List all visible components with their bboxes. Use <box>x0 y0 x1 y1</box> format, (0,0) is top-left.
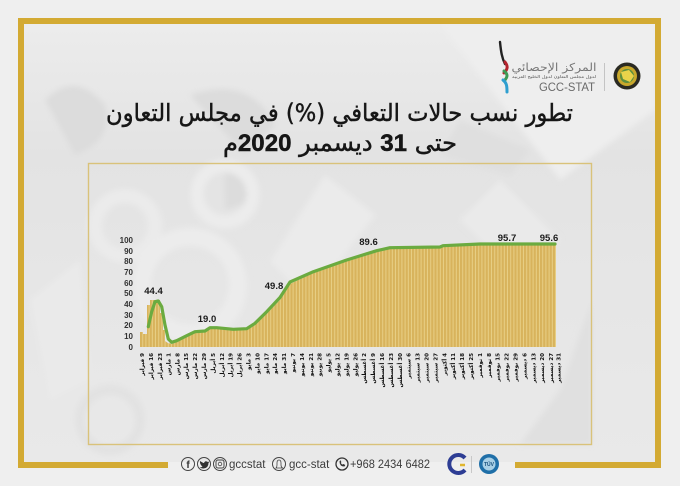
x axis date labels: 18 أكتوبر <box>458 353 466 380</box>
icon: G certification mark <box>449 455 465 473</box>
title: تطور نسب حالات التعافي (%) في مجلس التعاون <box>106 99 573 127</box>
x axis date labels: 31 مايو <box>282 353 288 375</box>
icon: TUV badge: TÜV <box>484 461 495 468</box>
x axis date labels: 19 يوليو <box>344 353 350 377</box>
x axis date labels: 16 أغسطس <box>378 353 386 388</box>
x axis date labels: 27 سبتمبر <box>433 353 439 383</box>
x axis date labels: 6 ديسمبر <box>522 353 528 380</box>
x axis date labels: 29 مارس <box>202 353 208 379</box>
data labels: 95.7 <box>498 233 516 244</box>
handle gccstat: gccstat <box>229 459 266 471</box>
x axis date labels: 3 مايو <box>246 353 252 371</box>
logo swoosh <box>500 42 507 92</box>
footer contact bar <box>182 454 499 474</box>
phone number: +968 2434 6482 <box>350 459 430 471</box>
icon: GCC emblem <box>614 62 640 90</box>
y axis labels: 90 <box>124 247 134 256</box>
data labels: 95.6 <box>540 233 558 244</box>
x axis date labels: 7 يونيو <box>291 353 297 373</box>
x axis date labels: 22 نوفمبر <box>505 353 511 383</box>
x axis date labels: 12 يوليو <box>336 353 342 377</box>
logo wordmark: المركز الإحصائي <box>512 61 596 74</box>
chart panel frame <box>88 164 592 444</box>
logo wordmark: لدول مجلس التعاون لدول الخليج العربية <box>512 74 596 79</box>
icon: twitter <box>198 458 210 470</box>
x axis date labels: 20 ديسمبر <box>540 353 546 384</box>
data labels: 89.6 <box>359 237 378 248</box>
y axis labels: 100 <box>120 236 134 245</box>
y axis labels <box>120 236 134 352</box>
y axis labels: 0 <box>129 343 134 352</box>
recovery line <box>148 244 555 342</box>
x axis date labels: 15 نوفمبر <box>496 353 502 383</box>
data labels: 49.8 <box>265 281 283 292</box>
x axis date labels: 17 مايو <box>264 353 270 375</box>
y axis labels: 80 <box>124 257 134 266</box>
data labels <box>144 233 558 325</box>
x axis date labels: 30 أغسطس <box>396 353 404 388</box>
data labels: 44.4 <box>144 286 163 297</box>
x axis date labels: 8 مارس <box>175 353 181 375</box>
x axis date labels: 19 أبريل <box>227 353 235 377</box>
x axis date labels: 5 أبريل <box>209 353 217 373</box>
y axis labels: 70 <box>124 268 134 277</box>
x axis date labels: 25 أكتوبر <box>467 353 475 380</box>
x axis date labels: 1 نوفمبر <box>478 353 484 379</box>
y axis labels: 20 <box>124 321 134 330</box>
x axis date labels: 15 مارس <box>184 353 190 379</box>
x axis date labels: 31 ديسمبر <box>556 353 562 384</box>
icon: instagram <box>214 458 226 470</box>
x axis date labels: 9 أغسطس <box>369 353 377 384</box>
data labels: 19.0 <box>198 314 216 325</box>
x axis date labels: 2 أغسطس <box>360 353 368 384</box>
x axis date labels: 20 سبتمبر <box>424 353 430 383</box>
x axis date labels: 16 فبراير <box>149 353 155 381</box>
bars <box>140 245 556 347</box>
x axis date labels: 28 يونيو <box>318 353 324 377</box>
y axis labels: 10 <box>124 332 134 341</box>
icon: facebook <box>182 458 194 471</box>
y axis labels: 50 <box>124 289 134 298</box>
x axis date labels: 27 ديسمبر <box>549 353 555 384</box>
x axis date labels: 14 يونيو <box>300 353 306 377</box>
y axis labels: 40 <box>124 300 134 309</box>
x axis date labels <box>140 353 562 388</box>
x axis date labels: 12 أبريل <box>218 353 226 377</box>
y axis labels: 30 <box>124 311 134 320</box>
icon: whatsapp <box>336 458 348 470</box>
logo: GCC-STAT <box>500 42 640 94</box>
x axis date labels: 10 مايو <box>255 353 261 375</box>
line and bar chart <box>120 233 562 388</box>
x axis date labels: 22 مارس <box>193 353 199 379</box>
logo wordmark <box>512 61 596 94</box>
x axis date labels: 23 فبراير <box>158 353 164 381</box>
title: حتى 31 ديسمبر 2020م <box>223 129 457 157</box>
x axis date labels: 4 أكتوبر <box>440 353 448 376</box>
x axis date labels: 6 سبتمبر <box>407 353 413 379</box>
icon: TUV badge <box>479 454 499 474</box>
x axis date labels: 29 نوفمبر <box>514 353 520 383</box>
x axis date labels: 8 نوفمبر <box>487 353 493 379</box>
x axis date labels: 1 مارس <box>166 353 172 375</box>
x axis date labels: 26 يوليو <box>353 353 359 377</box>
y axis labels: 60 <box>124 279 134 288</box>
x axis date labels: 9 فبراير <box>140 353 146 377</box>
x axis date labels: 24 مايو <box>273 353 279 375</box>
x axis date labels: 23 أغسطس <box>387 353 395 388</box>
x axis date labels: 13 ديسمبر <box>531 353 537 384</box>
handle gcc-stat: gcc-stat <box>289 459 330 471</box>
icon: facebook: f <box>186 460 190 471</box>
x axis date labels: 11 أكتوبر <box>449 353 457 380</box>
x axis date labels: 5 يوليو <box>327 353 333 373</box>
x axis date labels: 26 أبريل <box>236 353 244 377</box>
logo wordmark: GCC-STAT <box>539 82 595 94</box>
icon: snapchat <box>272 458 286 470</box>
x axis date labels: 21 يونيو <box>309 353 315 377</box>
x axis date labels: 13 سبتمبر <box>416 353 422 383</box>
title <box>106 99 573 157</box>
